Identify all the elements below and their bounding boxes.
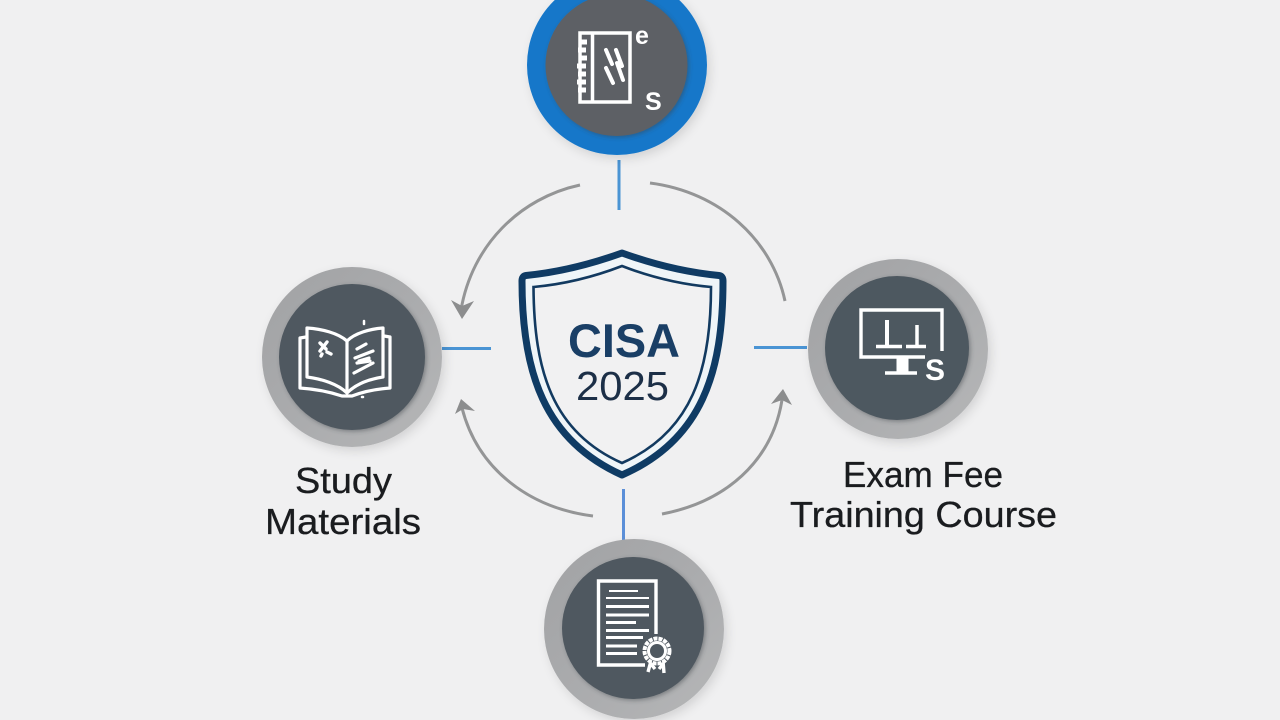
arrow: top-right arc	[650, 183, 785, 301]
coin glyphs: e	[635, 22, 649, 50]
exam fee ring	[808, 259, 988, 439]
top node disc	[546, 0, 688, 136]
label: Study Materials: Study	[295, 460, 392, 501]
icon: notebook with coins	[577, 22, 662, 116]
connector: top	[618, 160, 620, 210]
seal	[644, 638, 670, 673]
label: Exam Fee Training Course: Training Course	[790, 494, 1057, 535]
connector: right	[754, 346, 807, 349]
certificate disc	[562, 557, 704, 699]
certificate ring	[544, 539, 724, 719]
icon: monitor with dollar	[861, 310, 945, 387]
dollar glyph: S	[925, 354, 945, 387]
panel: bottom certificate node	[544, 539, 724, 719]
label: Exam Fee Training Course: Exam Fee	[843, 454, 1003, 495]
label: Study Materials	[265, 460, 421, 542]
central shield	[522, 253, 723, 475]
panel: top node	[527, 0, 707, 155]
study materials ring	[262, 267, 442, 447]
coin glyphs: S	[645, 88, 662, 116]
icon: open book	[300, 321, 390, 397]
panel: exam fee and training course node	[808, 259, 988, 439]
top node ring	[527, 0, 707, 155]
connector: bottom	[622, 489, 625, 540]
study materials disc	[279, 284, 425, 430]
panel: study materials node	[262, 267, 442, 447]
label: Exam Fee Training Course	[790, 454, 1057, 535]
shield year: 2025: 2025	[576, 363, 669, 409]
arrow: top-left arc	[451, 185, 580, 319]
label: Study Materials: Materials	[265, 501, 421, 542]
shield title: CISA: CISA	[568, 314, 680, 367]
shield outer border	[522, 253, 723, 475]
exam fee disc	[825, 276, 969, 420]
arrow: bottom-right arc	[662, 389, 792, 514]
arrow: bottom-left arc	[455, 399, 593, 516]
icon: certificate with seal	[598, 581, 670, 673]
shield inner line	[534, 266, 711, 463]
coin glyphs	[635, 22, 662, 116]
connector: left	[442, 347, 491, 350]
